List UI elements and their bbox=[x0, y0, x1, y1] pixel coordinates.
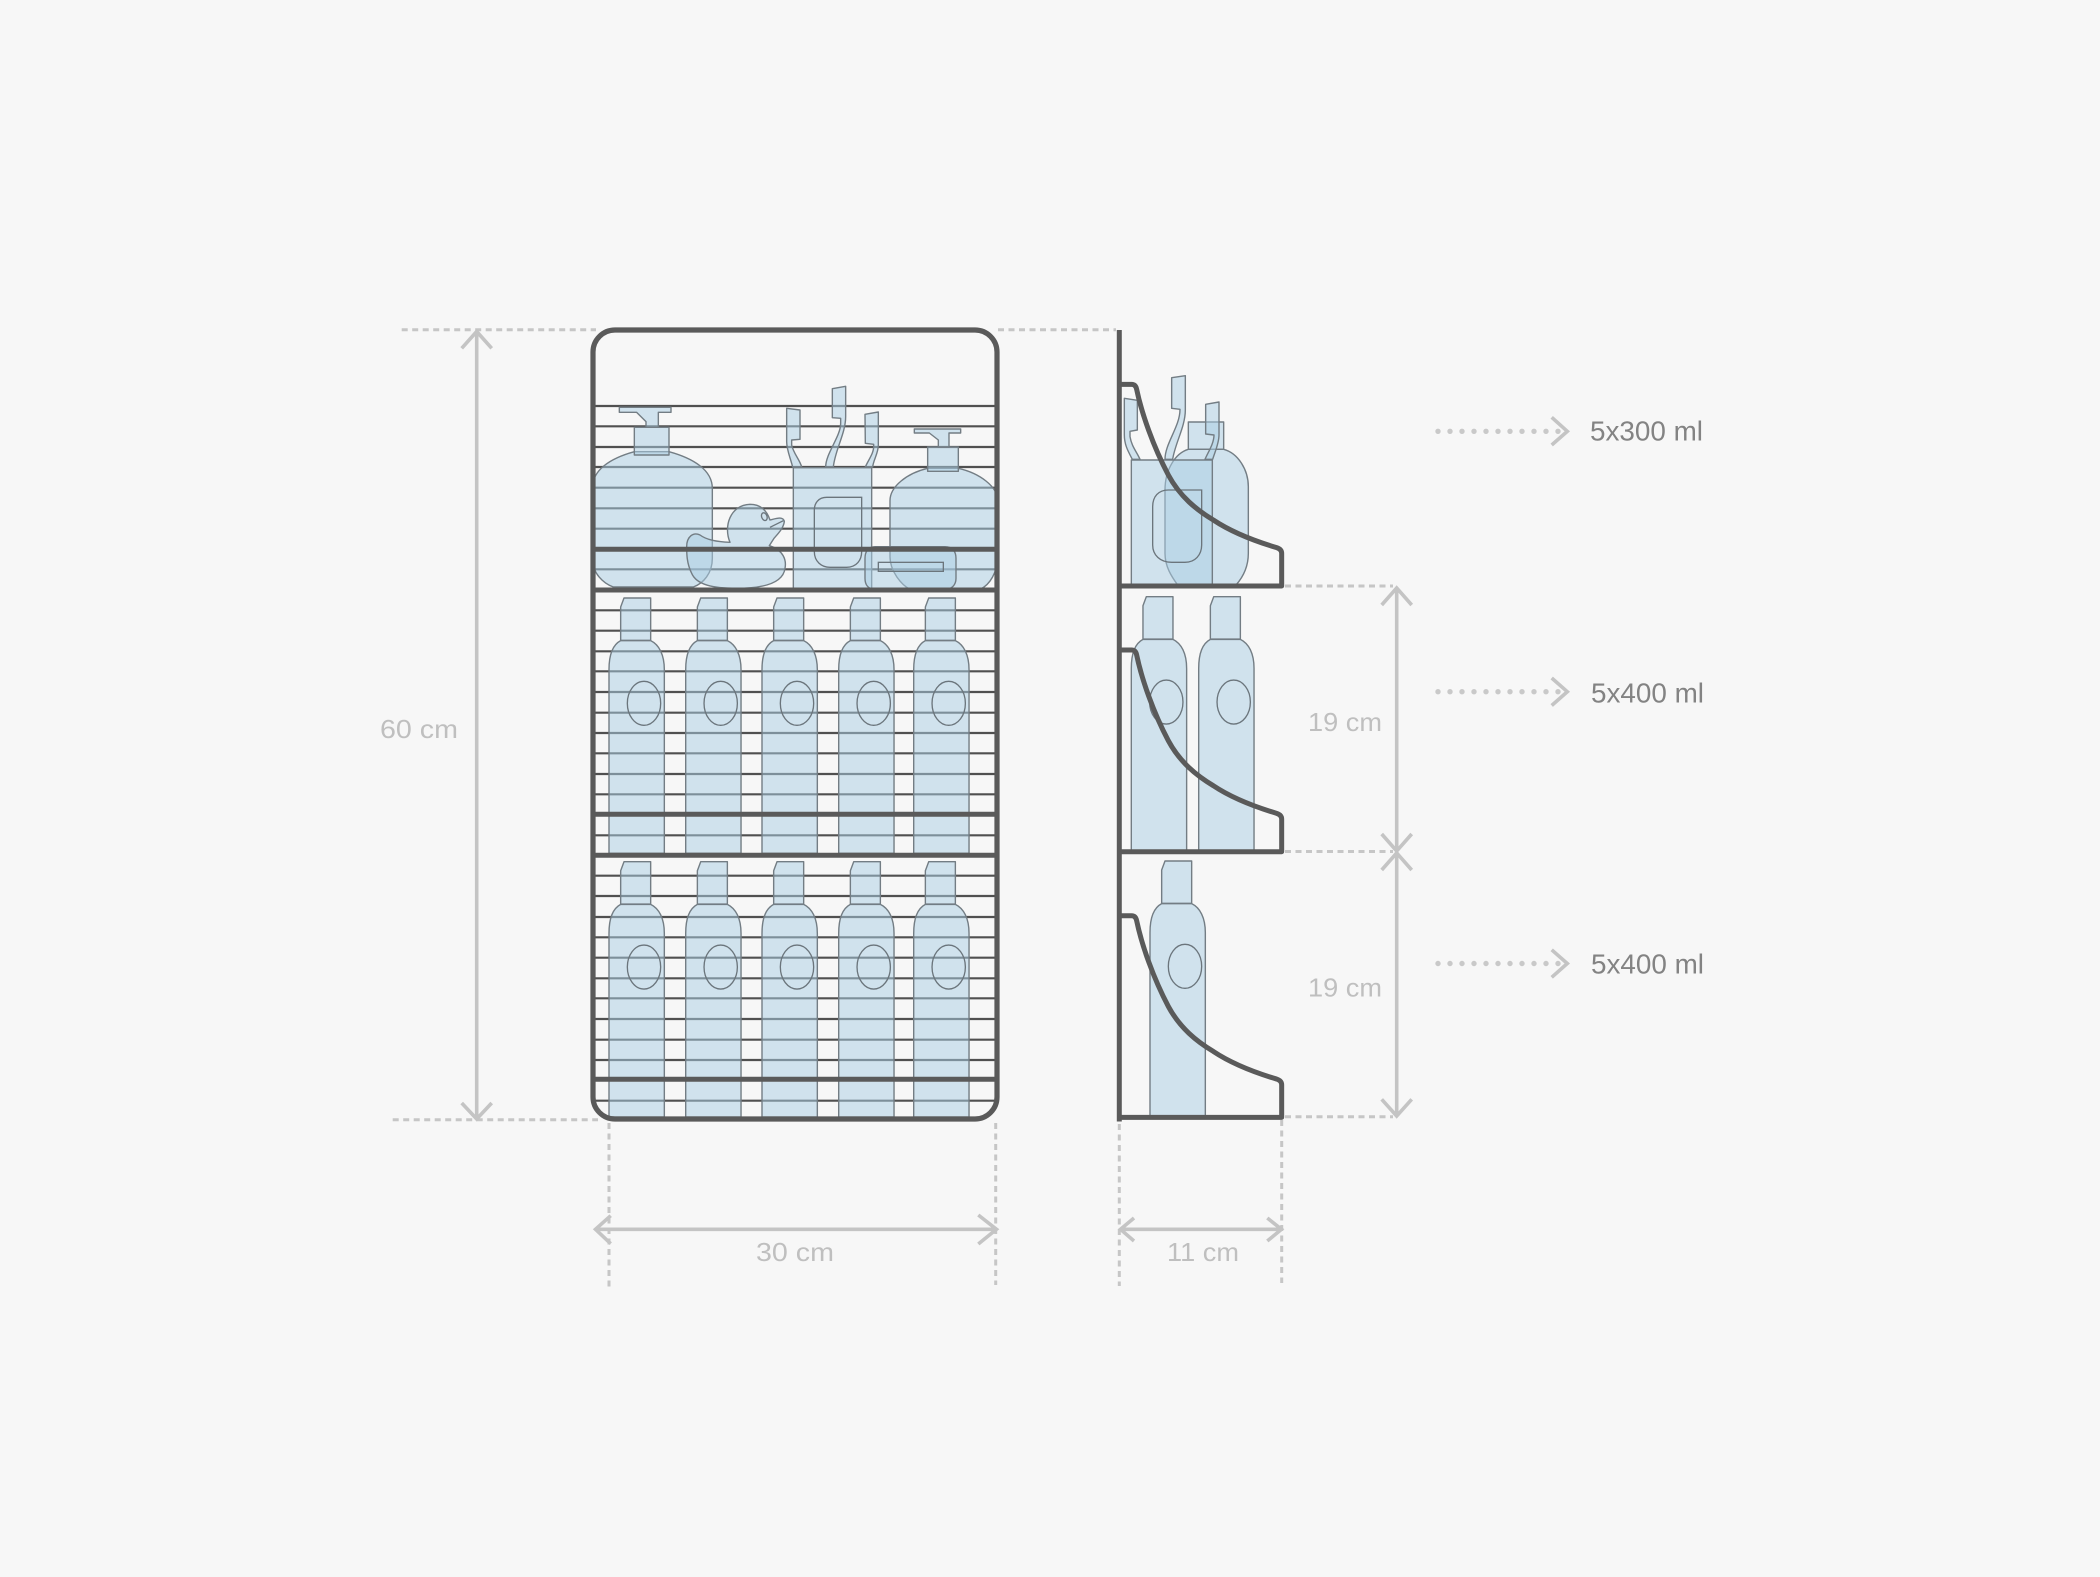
bottom row of bottles bbox=[609, 862, 969, 1117]
panel: front view of shelf bbox=[592, 330, 998, 1119]
label: 11 cm: 11 cm bbox=[1167, 1237, 1239, 1267]
icon: side right toothbrush bbox=[1205, 402, 1219, 459]
side items: top shelf bbox=[1124, 376, 1248, 585]
arrow: dotted top bbox=[1438, 417, 1567, 445]
side bottle: bottom shelf bbox=[1150, 861, 1205, 1116]
shelf profile: middle bbox=[1119, 650, 1282, 852]
label: 30 cm: 30 cm bbox=[756, 1237, 834, 1267]
icon: rubber duck bbox=[687, 504, 785, 588]
shelf profile: top bbox=[1119, 384, 1282, 586]
label: 19 cm upper: 19 cm bbox=[1308, 707, 1382, 737]
icon: large pump bottle bbox=[592, 407, 712, 587]
arrow: 30 cm width bbox=[596, 1215, 996, 1244]
icon: toothbrush left bbox=[787, 408, 802, 467]
wall upright bbox=[1117, 330, 1122, 1122]
icon: side toothbrushes bbox=[1124, 376, 1185, 459]
label: 60 cm: 60 cm bbox=[380, 714, 458, 744]
callout: 5x400 ml middle bbox=[1438, 677, 1704, 708]
arrow: 60 cm height bbox=[462, 331, 492, 1119]
shelf lips bbox=[593, 549, 997, 1079]
icon: small pump bottle bbox=[890, 429, 998, 589]
rack wires bbox=[593, 406, 997, 1101]
arrow: 19 cm lower bbox=[1382, 852, 1412, 1116]
shelf profile: bottom bbox=[1119, 916, 1282, 1117]
top shelf items bbox=[592, 386, 998, 589]
arrow: dotted bottom bbox=[1438, 950, 1567, 977]
dimension guide lines bbox=[393, 330, 1393, 1287]
callout: 5x400 ml bottom bbox=[1438, 948, 1704, 980]
arrow: 19 cm upper bbox=[1382, 588, 1412, 851]
icon: side pump bottle bbox=[1165, 422, 1248, 585]
icon: toothbrush cup bbox=[793, 468, 872, 588]
icon: toothbrush right bbox=[865, 412, 878, 467]
arrow: dotted middle bbox=[1438, 678, 1567, 706]
callout: 5x300 ml bbox=[1438, 416, 1703, 447]
icon: soap dish bbox=[865, 547, 956, 589]
label: 19 cm lower: 19 cm bbox=[1308, 973, 1382, 1003]
label: bottom capacity: 5x400 ml bbox=[1591, 948, 1704, 980]
outer frame bbox=[593, 330, 997, 1119]
label: top capacity: 5x300 ml bbox=[1590, 416, 1703, 447]
arrow: 11 cm depth bbox=[1120, 1218, 1282, 1241]
panel: side view of shelf bbox=[1119, 330, 1282, 1122]
label: middle capacity: 5x400 ml bbox=[1591, 677, 1704, 708]
icon: toothbrush middle bbox=[826, 386, 846, 467]
middle row of bottles bbox=[609, 598, 969, 853]
side bottles: middle shelf bbox=[1131, 597, 1254, 852]
icon: side cup bbox=[1131, 460, 1212, 585]
